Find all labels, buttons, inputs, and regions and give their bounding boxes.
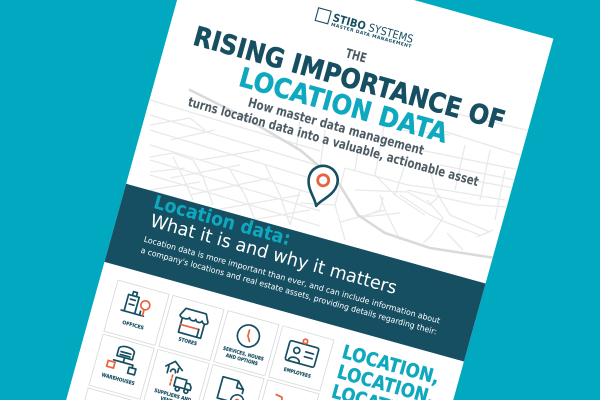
street map xyxy=(150,90,535,258)
icon: location pin xyxy=(302,162,341,210)
heading: location, location, location: LOCATION, xyxy=(340,341,442,389)
card: suppliers xyxy=(144,349,209,400)
logo wordmark: STIBO SYSTEMS xyxy=(331,11,415,46)
card: warehouses xyxy=(89,334,154,399)
label: WAREHOUSES xyxy=(101,372,135,387)
subtitle: How master data management xyxy=(246,96,426,159)
logo xyxy=(314,7,416,50)
band body text: a company's locations and real estate assets, providing details regarding their: xyxy=(140,246,438,337)
icon: storefront xyxy=(175,307,210,339)
title: location data: LOCATION DATA xyxy=(236,62,451,150)
title: rising importance of: RISING IMPORTANCE OF xyxy=(190,21,508,137)
card: shopping xyxy=(254,380,319,400)
icon: office building xyxy=(121,290,152,317)
icon: cart xyxy=(272,395,301,400)
band subheading: What it is and why it matters xyxy=(148,211,399,299)
label: OFFICES xyxy=(122,320,145,332)
card: third row xyxy=(74,388,194,400)
title: the: THE xyxy=(344,47,368,67)
card: offices xyxy=(104,280,169,345)
icon: ID badge xyxy=(285,335,321,368)
icon: document with gear xyxy=(216,377,249,400)
card: stores xyxy=(159,295,224,361)
label: EMPLOYEES xyxy=(283,367,312,380)
logo mark xyxy=(315,8,331,24)
card: employees xyxy=(269,326,334,391)
card: configuration xyxy=(199,365,264,400)
icon: warehouse xyxy=(106,343,141,375)
panel: dark band xyxy=(104,183,486,361)
label: AND OPTIONS xyxy=(225,353,259,367)
icon: house and truck xyxy=(160,359,197,394)
subtitle: turns location data into a valuable, actionable asset xyxy=(186,95,480,190)
icon: clock xyxy=(235,322,262,350)
band body text: Location data is more important than ever, and can include information about xyxy=(143,235,441,325)
label: SERVICES, HOURS xyxy=(222,346,265,363)
label: STORES xyxy=(178,337,198,347)
subtitle xyxy=(186,80,484,190)
card: services xyxy=(214,311,279,376)
band heading: Location data: xyxy=(151,191,293,250)
logo tagline: MASTER DATA MANAGEMENT xyxy=(330,22,413,50)
